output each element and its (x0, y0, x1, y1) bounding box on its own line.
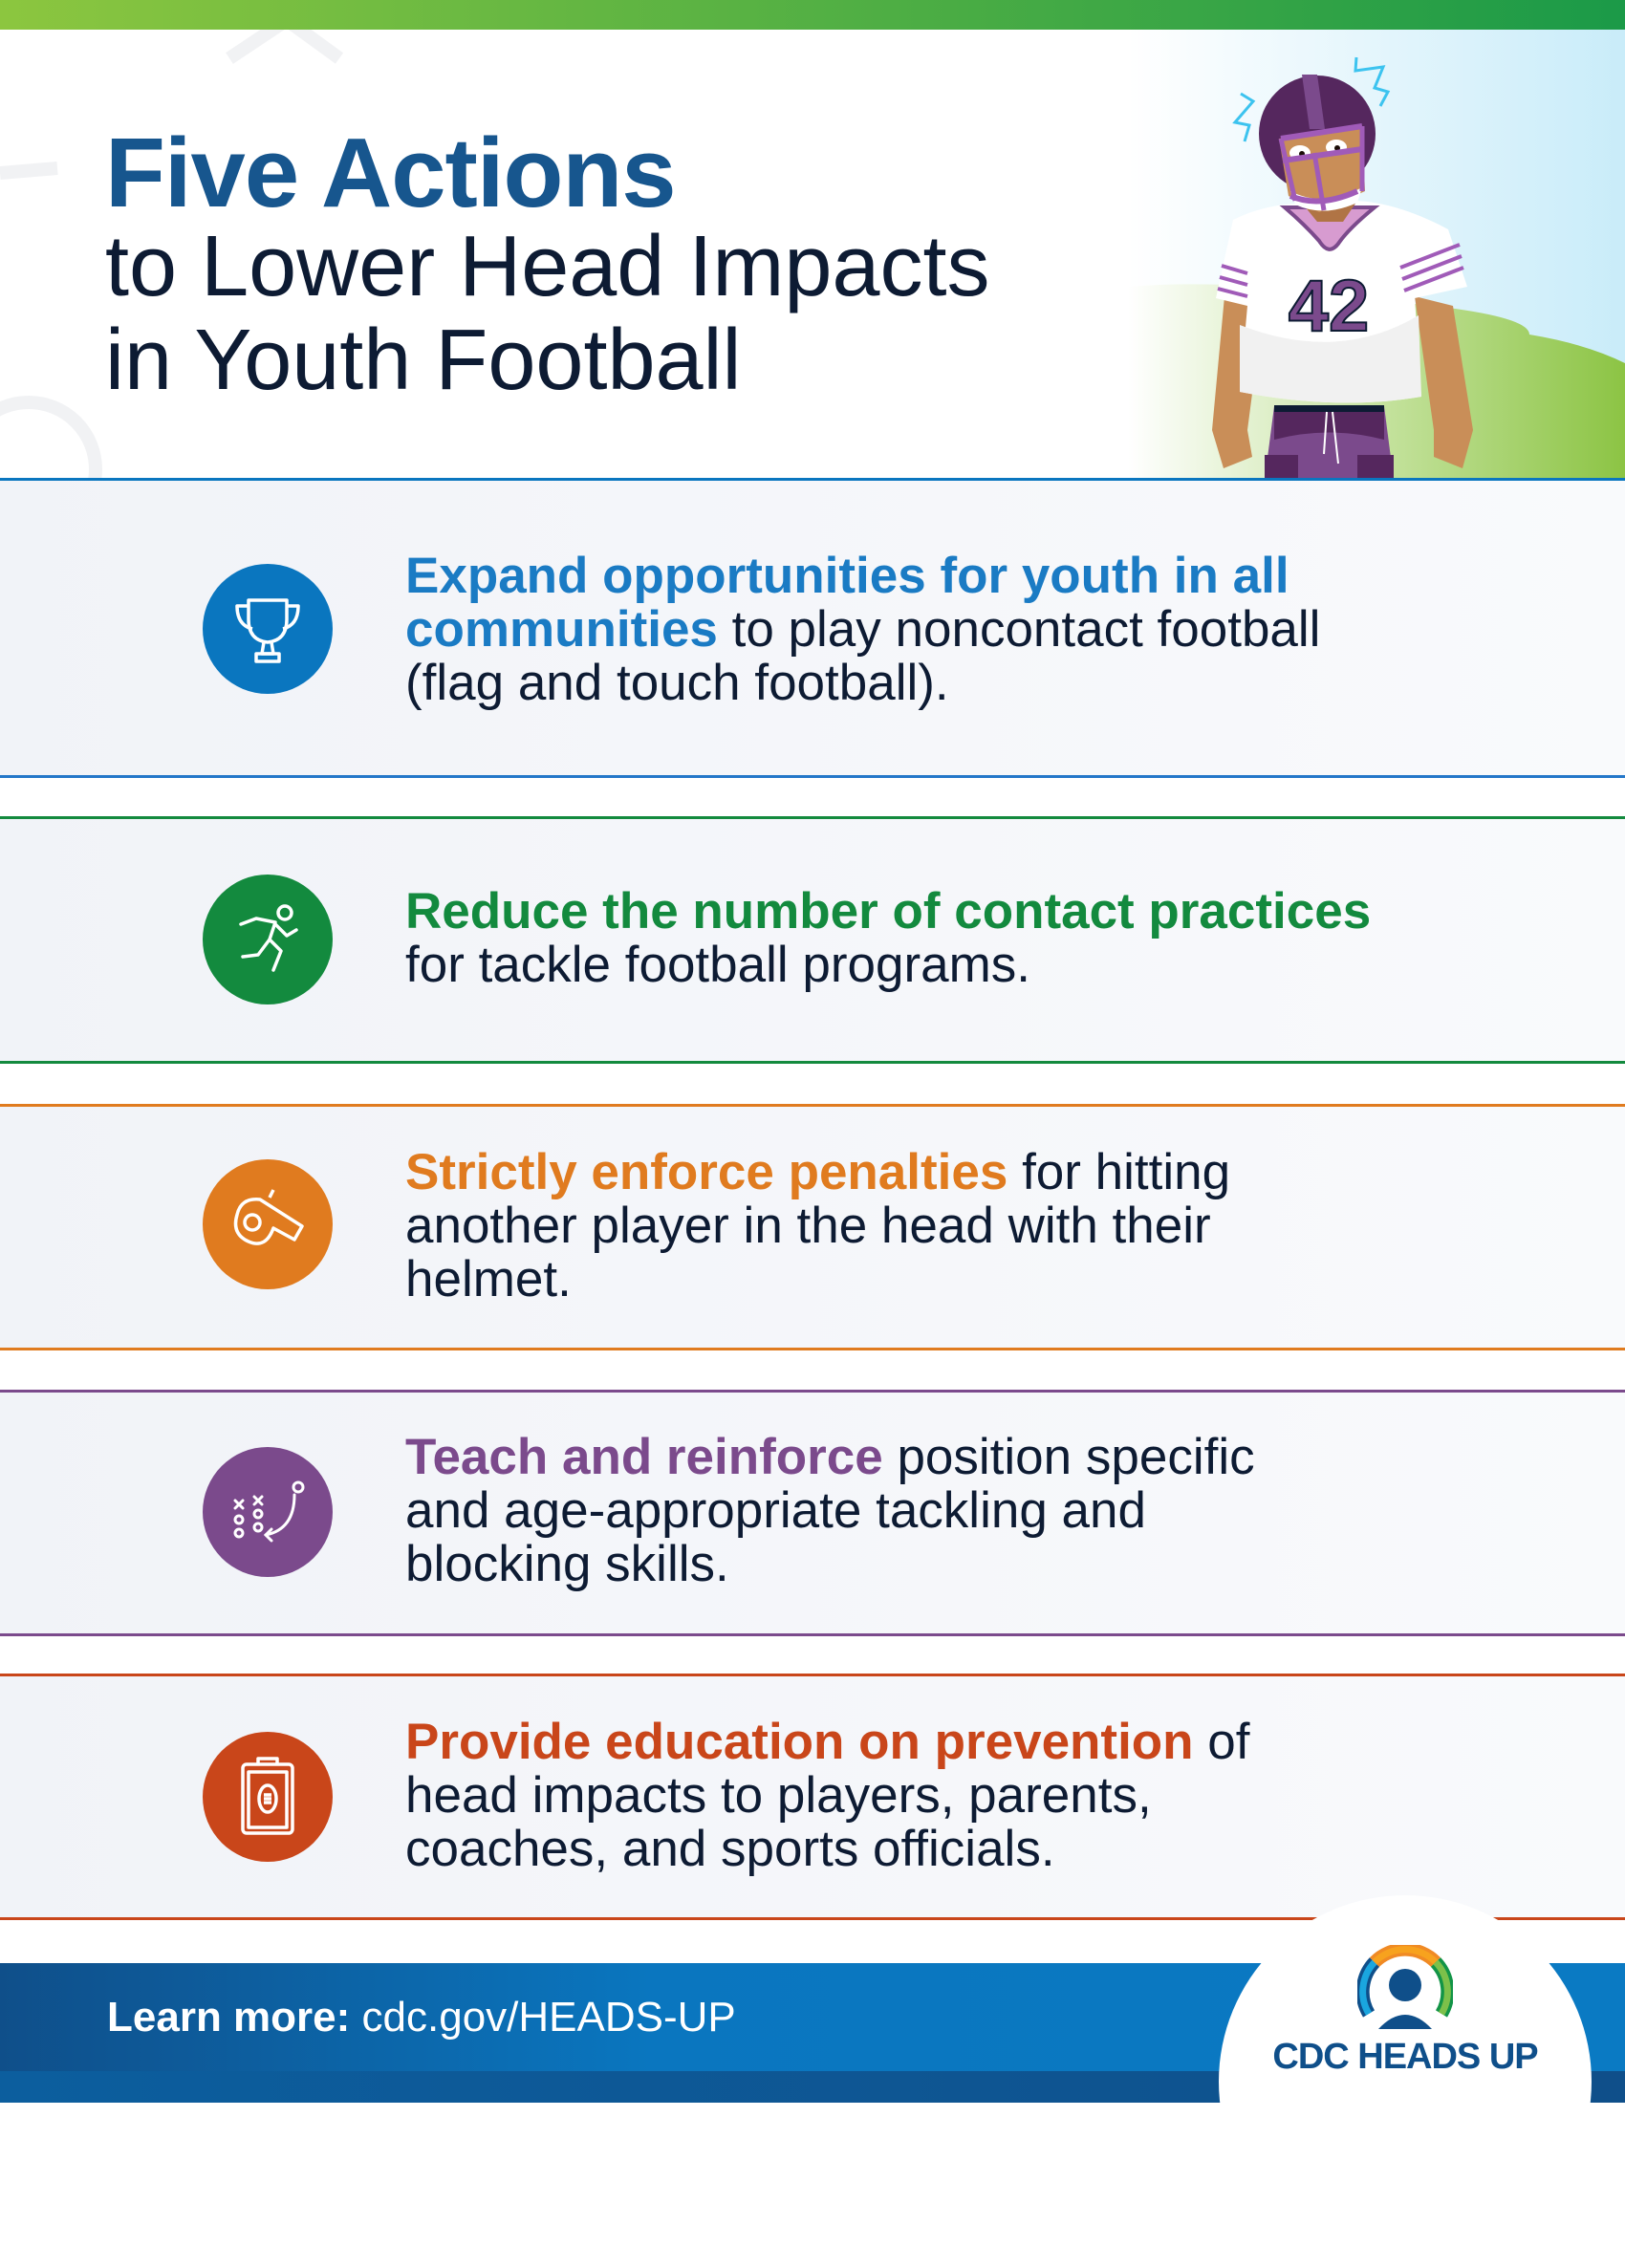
title (105, 118, 989, 408)
text: action 3 (405, 1144, 1230, 1307)
panel: action 1 (0, 481, 1625, 777)
icon: clipboard (203, 1732, 333, 1862)
text: action 4 (405, 1429, 1255, 1592)
text: action 2: Reduce the number of contact practices (405, 883, 1371, 940)
title: to Lower Head Impacts (105, 219, 989, 314)
pants (1265, 406, 1394, 480)
collar and neck (1285, 207, 1375, 249)
text: action 2: for tackle football programs. (405, 937, 1030, 993)
illustration: football player (1149, 30, 1625, 478)
panel: action 4 (0, 1392, 1625, 1635)
header divider (0, 478, 1625, 481)
top gradient bar (0, 0, 1625, 30)
text: action 4: Teach and reinforce position specific (405, 1429, 1255, 1485)
text: action 1: Expand opportunities for youth in all (405, 548, 1289, 604)
text: action 3: Strictly enforce penalties for hitting (405, 1144, 1230, 1200)
text: action 5: head impacts to players, parents, (405, 1767, 1152, 1824)
text: action 1: (flag and touch football). (405, 655, 949, 711)
decorative faint shapes (0, 30, 343, 478)
panel: action 3 (0, 1106, 1625, 1350)
panel: action 2 (0, 818, 1625, 1063)
text: action 2 (405, 883, 1371, 993)
panel: action 5 (0, 1675, 1625, 1919)
text: action 5 (405, 1714, 1250, 1877)
text: action 5: Provide education on prevention of (405, 1714, 1250, 1770)
text: action 4: blocking skills. (405, 1536, 729, 1592)
number 42: 42 (1289, 266, 1369, 347)
logo: CDC HEADS UP (1219, 1895, 1592, 2268)
jersey (1216, 201, 1467, 402)
icon: trophy (203, 564, 333, 694)
text: action 1: communities to play noncontact football (405, 601, 1320, 658)
text: action 3: another player in the head with their (405, 1198, 1211, 1254)
text: action 3: helmet. (405, 1251, 572, 1307)
icon: playbook (203, 1447, 333, 1577)
icon: runner (203, 875, 333, 1004)
zigzags (1235, 94, 1253, 141)
text: action 1 (405, 548, 1320, 711)
head and helmet (1259, 76, 1376, 192)
footer band (0, 1963, 1625, 2103)
logo: CDC HEADS UP: CDC HEADS UP (1272, 2037, 1538, 2077)
arms (1212, 296, 1264, 468)
text: action 4: and age-appropriate tackling and (405, 1482, 1146, 1539)
title: in Youth Football (105, 313, 742, 408)
icon: whistle (203, 1159, 333, 1289)
text: action 5: coaches, and sports officials. (405, 1821, 1055, 1877)
footer text: learn more: Learn more: cdc.gov/HEADS-UP (107, 1994, 736, 2041)
title: Five Actions (105, 118, 676, 227)
